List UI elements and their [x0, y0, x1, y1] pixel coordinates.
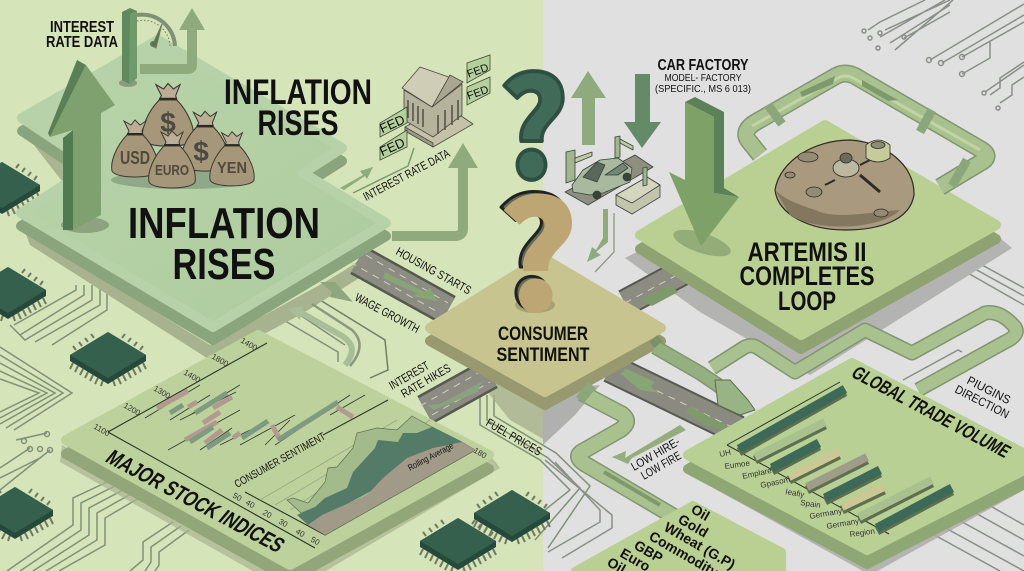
- heading: inflation rises large: RISES: [172, 240, 276, 289]
- bar labels: UH: [719, 448, 732, 459]
- background: right grey zone: [543, 0, 1024, 571]
- chip: [0, 487, 53, 541]
- chart labels: 30: [277, 517, 290, 529]
- panel: major stock indices: [66, 335, 489, 571]
- bar labels: Spain: [800, 498, 821, 510]
- icon: FED signs: FED: [377, 112, 407, 136]
- chart labels: Rolling Average: [406, 440, 455, 473]
- chart labels: CONSUMER SENTIMENT: [233, 431, 328, 491]
- icon: money bags: $: [160, 107, 176, 138]
- heading: inflation rises large: [128, 199, 320, 289]
- post: [119, 8, 137, 87]
- chart labels: 50: [231, 491, 244, 503]
- heading: inflation rises small: INFLATION: [224, 73, 372, 112]
- panel: commodity list: Wheat (G.P): [662, 519, 738, 571]
- label: low hire low fire: [628, 434, 684, 483]
- chart labels: 40: [294, 527, 307, 539]
- gauge icon: [137, 15, 175, 48]
- panel: commodity list: Oil: [688, 501, 713, 524]
- bar labels: Ieafiy: [785, 487, 805, 499]
- chart axes: [108, 343, 475, 548]
- heading: inflation rises small: RISES: [258, 104, 338, 143]
- heading: artemis ii completes loop: LOOP: [778, 286, 836, 316]
- chart labels: 40: [244, 498, 257, 510]
- shadows under panels: [20, 130, 1024, 571]
- big down arrow: [669, 97, 739, 262]
- arrow: small down: [624, 74, 661, 148]
- label: low hire low fire: LOW FIRE: [638, 448, 684, 483]
- heading: consumer sentiment: CONSUMER: [498, 324, 588, 345]
- icon: money bags: [111, 84, 255, 189]
- chip: [0, 162, 40, 216]
- chart labels: 1200: [122, 401, 142, 418]
- chart labels: 1400: [239, 336, 259, 353]
- label: car factory: CAR FACTORY: [658, 57, 749, 74]
- label: interest rate hikes: INTEREST: [386, 358, 432, 393]
- label: car factory: (SPECIFIC., MS 6 013): [655, 83, 751, 95]
- chart labels: 20: [261, 508, 274, 520]
- label: interest rate hikes: [386, 358, 453, 401]
- heading: inflation rises small: [224, 73, 372, 143]
- chart labels: 180: [472, 446, 489, 461]
- icon: FED signs: FED: [466, 84, 490, 103]
- icon: FED signs: FED: [377, 135, 407, 159]
- heading: inflation rises large: INFLATION: [128, 199, 320, 248]
- panel: inflation rises base: [21, 40, 386, 340]
- question mark: green: ?: [498, 20, 569, 218]
- label: low hire low fire: LOW HIRE-: [628, 434, 682, 474]
- bar labels: Germany: [809, 506, 843, 521]
- bar labels: Region: [849, 527, 875, 539]
- icon: car factory: [565, 136, 660, 214]
- pipe: to trade panel: [652, 313, 1016, 415]
- chip: [0, 267, 46, 321]
- chart labels: 1400: [182, 368, 202, 385]
- arrow: small up: [571, 71, 606, 145]
- label: interest rate hikes: RATE HIKES: [398, 361, 453, 401]
- heading: artemis ii completes loop: ARTEMIS II: [748, 237, 866, 267]
- bar chart: [727, 382, 952, 534]
- heading: consumer sentiment: SENTIMENT: [496, 345, 590, 366]
- big up arrow: [48, 60, 115, 233]
- question mark: tan: ?: [494, 135, 574, 350]
- label: interest rate data: INTEREST: [50, 19, 114, 36]
- icon: money bags: $: [193, 136, 209, 167]
- background: left green zone: [0, 0, 543, 571]
- panel: commodity list: [575, 501, 782, 571]
- small arrow and line: fed: [340, 148, 414, 193]
- bar labels: Emplare: [742, 466, 773, 481]
- bar labels: Eumoe: [724, 458, 751, 471]
- label: plugins direction: DIRECTION: [953, 382, 1012, 421]
- arrow: road arrows: [320, 272, 735, 464]
- candlestick chart: [145, 385, 365, 450]
- label: wage growth: WAGE GROWTH: [353, 290, 422, 336]
- chart labels: 50: [309, 535, 322, 547]
- icon: FED signs: FED: [466, 62, 490, 81]
- icon: FED signs: [377, 55, 490, 160]
- circuit traces: right: [545, 0, 1024, 571]
- label: interest rate data rotated: INTEREST RATE DATA: [361, 146, 452, 204]
- panel: commodity list: GBP: [632, 537, 666, 566]
- heading: artemis ii completes loop: [740, 237, 874, 316]
- icon: moon with base: [775, 140, 914, 230]
- chart labels: 1100: [92, 422, 112, 439]
- pipe: to commodity panel: [578, 385, 680, 520]
- heading: artemis ii completes loop: COMPLETES: [740, 261, 874, 291]
- chart labels: 1300: [152, 384, 172, 401]
- label: interest rate data: [46, 19, 118, 51]
- elbow arrow: top: [140, 8, 205, 69]
- icon: money bags: EURO: [155, 162, 189, 179]
- bar labels: Germany: [826, 516, 860, 531]
- chart labels: [92, 336, 489, 547]
- area chart: [287, 416, 475, 535]
- icon: money bags: YEN: [217, 160, 247, 177]
- label: car factory: [655, 57, 751, 95]
- label: interest rate data: RATE DATA: [46, 34, 118, 51]
- label: car factory: MODEL- FACTORY: [664, 72, 742, 84]
- chip: [420, 518, 496, 571]
- curved trace arrow: [288, 304, 360, 366]
- chip: [474, 490, 550, 544]
- panel: consumer sentiment: [430, 258, 661, 405]
- bar labels: [719, 448, 875, 539]
- arrow: below car: [587, 209, 614, 272]
- bar labels: Gpasom: [760, 475, 791, 490]
- panel: commodity list: Gold: [676, 511, 711, 541]
- roads between panels: [350, 255, 738, 430]
- icon: money bags: USD: [120, 148, 150, 168]
- circuit traces: left: [0, 285, 590, 571]
- label: fuel prices: FUEL PRICES: [484, 415, 544, 459]
- heading: consumer sentiment: [496, 324, 590, 366]
- elbow arrow: bottom right inflation: [392, 143, 478, 236]
- question mark: tan: ?: [498, 138, 578, 353]
- panel: artemis base: [640, 125, 996, 349]
- label: housing starts: HOUSING STARTS: [394, 244, 474, 297]
- chart labels: 1800: [210, 352, 230, 369]
- chip: [70, 332, 146, 386]
- label: plugins direction: PIUGINS: [965, 373, 1013, 407]
- pipe: loop around artemis: [746, 74, 987, 187]
- panel: global trade volume: [688, 363, 1024, 564]
- icon: federal reserve building: [402, 67, 473, 147]
